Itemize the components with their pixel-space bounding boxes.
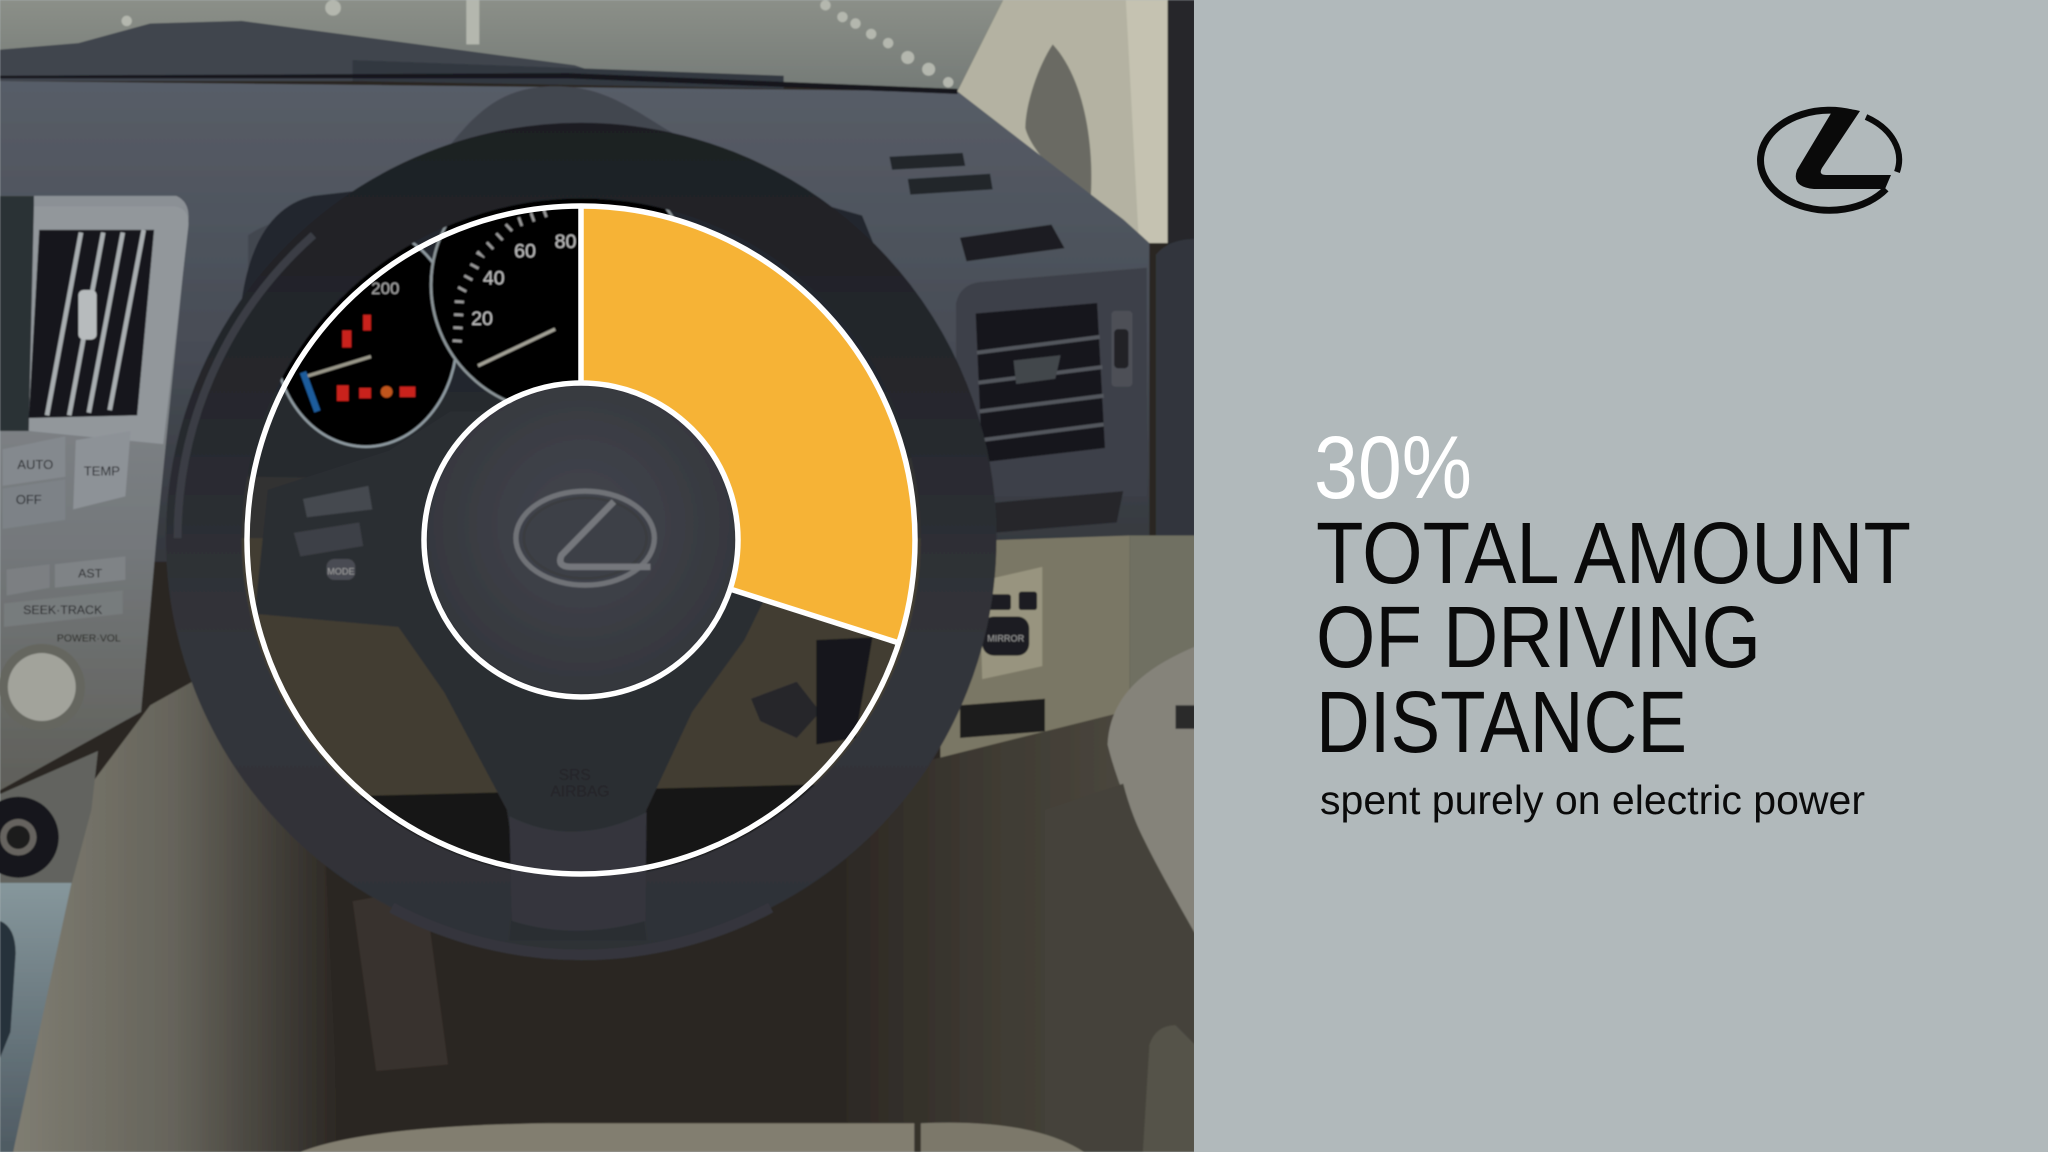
road markings bbox=[121, 0, 953, 88]
wheel interior lower beige bbox=[222, 179, 940, 897]
speaker bbox=[1025, 44, 1091, 200]
windshield wipers bbox=[0, 21, 598, 81]
right vent plate bbox=[956, 268, 1147, 522]
gauge right: 40 bbox=[483, 268, 505, 290]
power knob bbox=[0, 644, 85, 730]
steering wheel rim bbox=[178, 161, 959, 955]
cruise stalk bbox=[751, 637, 872, 744]
heading: total amount of driving distance: DISTANCE bbox=[1316, 674, 1687, 771]
right side pillar bbox=[1156, 239, 1195, 836]
subheading: spent purely on electric power bbox=[1320, 777, 1865, 823]
panel: dashboard photo bbox=[0, 0, 1195, 1152]
steering wheel spokes and hub: AIRBAG bbox=[550, 784, 610, 801]
steering wheel spokes and hub: SRS bbox=[559, 767, 591, 784]
instrument bezel bbox=[242, 157, 934, 483]
heading: total amount of driving distance: TOTAL AMOUNT bbox=[1316, 505, 1911, 602]
steering wheel spokes and hub bbox=[255, 385, 773, 940]
mirror switch plate: MIRROR bbox=[987, 633, 1025, 643]
left console bbox=[13, 614, 340, 1152]
beige lower dash bbox=[940, 536, 1130, 771]
steering wheel spokes and hub: MODE bbox=[327, 567, 355, 577]
dark footwell inside wheel bbox=[327, 784, 849, 901]
audio buttons: SEEK·TRACK bbox=[23, 603, 103, 617]
right vent bbox=[976, 303, 1132, 462]
seats bbox=[300, 1123, 914, 1152]
left blue panel bbox=[0, 882, 72, 1152]
gauge left: 200 bbox=[371, 279, 399, 298]
silver center stack bbox=[0, 196, 188, 790]
instrument hood bbox=[248, 86, 934, 562]
door armrest bbox=[1108, 647, 1195, 934]
ignition socket bbox=[0, 797, 59, 878]
dash slots bbox=[889, 153, 965, 170]
A pillar bbox=[957, 0, 1162, 243]
dashboard bbox=[0, 81, 1149, 562]
heading: total amount of driving distance bbox=[1316, 505, 1911, 771]
left vent bbox=[29, 230, 154, 418]
climate buttons: TEMP bbox=[84, 463, 120, 478]
silver lower plate bbox=[0, 751, 98, 883]
icon: Lexus logo bbox=[1761, 109, 1899, 210]
door and lower right panels bbox=[836, 679, 1195, 1152]
audio buttons bbox=[4, 556, 125, 644]
steering badge bbox=[516, 491, 654, 585]
gauge right bbox=[431, 157, 692, 413]
accelerator pedal bbox=[353, 888, 448, 1071]
gauge right: 60 bbox=[514, 240, 536, 262]
climate buttons: AUTO bbox=[17, 457, 53, 472]
audio buttons: POWER·VOL bbox=[57, 633, 121, 644]
climate buttons: OFF bbox=[16, 492, 42, 507]
climate buttons bbox=[3, 431, 131, 529]
gauge left bbox=[274, 227, 457, 447]
heading: total amount of driving distance: OF DRIVING bbox=[1316, 589, 1761, 686]
panel: grey text panel bbox=[1194, 0, 2048, 1152]
mirror switch plate bbox=[980, 567, 1042, 679]
glovebox ledge bbox=[993, 491, 1123, 533]
audio buttons: AST bbox=[78, 566, 103, 580]
chart segment: 30 percent highlight bbox=[581, 206, 915, 643]
headline statistic: 30%: 30% bbox=[1314, 417, 1472, 517]
gauge right: 20 bbox=[471, 308, 493, 330]
windshield bbox=[0, 0, 1003, 91]
gauge right: 80 bbox=[555, 231, 577, 253]
donut chart: 30 percent bbox=[247, 206, 915, 874]
